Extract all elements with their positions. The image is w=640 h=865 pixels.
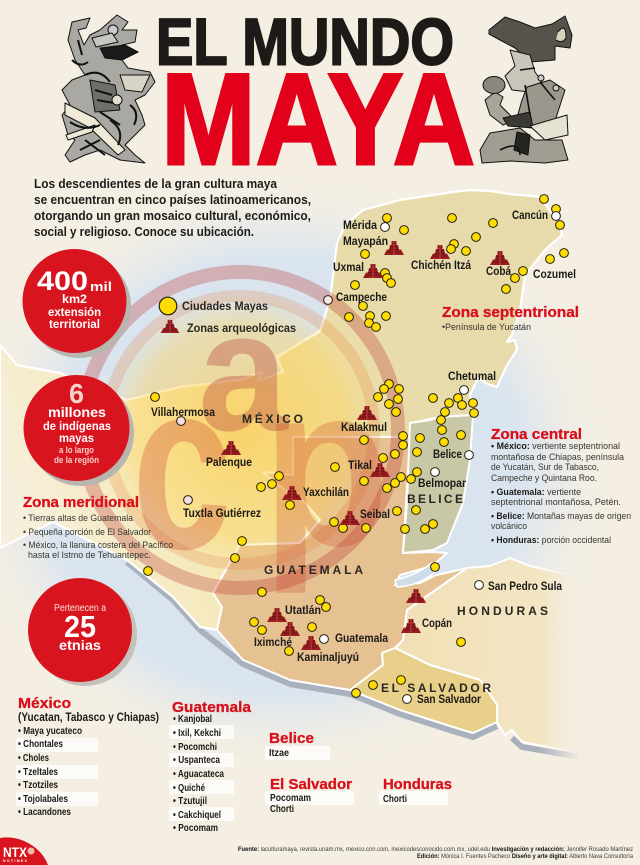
panel: ethnic groups Guatemala: [169, 699, 252, 834]
map labels: Campeche: [336, 292, 387, 304]
panel: ethnic groups Belice: [265, 730, 330, 760]
panel: ethnic groups México: • Lacandones: [18, 806, 71, 818]
watermark: c: [132, 331, 232, 599]
map labels: Belmopar: [418, 478, 466, 490]
logo: NTX Notimex: [0, 837, 48, 865]
panel: ethnic groups El Salvador: El Salvador: [270, 776, 352, 793]
panel: Zona central: septentrional montañosa, Petén.: [491, 497, 621, 508]
map labels: Guatemala: [335, 633, 389, 645]
panel: ethnic groups México: • Tojolabales: [18, 793, 68, 805]
sources and credits: Edición: Mónica I. Fuentes Pacheco Diseño y arte digital: Alberto Nava Consultoría: [417, 853, 633, 860]
stat circle: 6 millones: de indígenas: [43, 419, 111, 433]
map labels: Villahermosa: [151, 407, 216, 419]
panel: ethnic groups Guatemala: • Ixil, Kekchi: [173, 727, 221, 739]
stat circle: 25 etnias: [28, 578, 137, 686]
stat circle: 400 mil km2: 400: [37, 266, 88, 296]
map of the Maya region: [0, 190, 600, 757]
watermark: a: [198, 277, 289, 467]
sources and credits: Fuente: laculturamaya, revista.unam.mx, mexico.cnn.com, mexicodesconocido.com.mx, udel.edu Investigación y redacción: Jennifer Rosado Martínez: [238, 846, 634, 853]
panel: ethnic groups El Salvador: Chorti: [270, 803, 294, 815]
map labels: San Pedro Sula: [488, 581, 563, 593]
panel: Zona central: • México: vertiente septentrional: [491, 441, 620, 452]
panel: Zona meridional: [23, 494, 173, 561]
map labels: BELICE: [407, 492, 463, 506]
stat circle: 6 millones: 6: [69, 378, 84, 409]
stat circle: 25 etnias: etnias: [59, 637, 101, 653]
panel: ethnic groups México: (Yucatan, Tabasco y Chiapas): [18, 712, 159, 724]
stat circle: 6 millones: millones: [48, 404, 106, 420]
sources and credits: [238, 846, 634, 860]
panel: Zona septentrional: [442, 304, 579, 333]
region: Belice: [403, 415, 473, 553]
markers: archaeological zones: [221, 241, 510, 650]
stat circle: 400 mil km2: mil: [90, 279, 112, 294]
map labels: Seibal: [360, 509, 390, 521]
map labels: Mérida: [343, 220, 378, 232]
panel: Zona meridional: • México, la llanura costera del Pacífico: [23, 540, 173, 551]
panel: ethnic groups México: • Choles: [18, 752, 49, 764]
region: México and Yucatán peninsula: [0, 190, 562, 630]
map labels: Iximché: [254, 637, 292, 649]
map labels: Palenque: [206, 457, 252, 469]
stat circle: 6 millones: mayas: [59, 431, 94, 445]
stat circle: 6 millones: de la región: [54, 455, 99, 465]
panel: ethnic groups Guatemala: • Quiché: [173, 782, 205, 794]
panel: ethnic groups El Salvador: [265, 776, 354, 815]
panel: ethnic groups Guatemala: Guatemala: [172, 699, 252, 716]
intro text: social y religioso. Conoce su ubicación.: [34, 224, 254, 239]
panel: Zona central: volcánico: [491, 521, 527, 532]
panel: Zona central: [491, 426, 631, 546]
panel: ethnic groups México: • Tzotziles: [18, 779, 58, 791]
icon: Maya warrior figure: [62, 15, 155, 163]
map labels: Chetumal: [448, 371, 496, 383]
logo: NTX Notimex: NOTIMEX: [3, 859, 28, 863]
map labels: MÉXICO: [242, 411, 303, 426]
map labels: Utatlán: [285, 605, 321, 617]
map labels: Kalakmul: [341, 422, 387, 434]
panel: Zona central: • Guatemala: vertiente: [491, 487, 581, 498]
panel: Zona central: montañosa de Chiapas, península: [491, 452, 625, 463]
map labels: Yaxchilán: [303, 487, 349, 499]
logo: NTX Notimex: NTX: [3, 844, 28, 860]
panel: Zona central: de Yucatán, Sur de Tabasco,: [491, 462, 599, 473]
intro text: otorgando un gran mosaico cultural, económico,: [34, 208, 311, 223]
intro text: Los descendientes de la gran cultura maya: [34, 176, 278, 191]
panel: ethnic groups Guatemala: • Aguacateca: [173, 768, 224, 780]
region: Honduras: [395, 558, 600, 753]
map labels: Cozumel: [533, 269, 576, 281]
panel: ethnic groups Honduras: [379, 776, 452, 805]
stat circle: 400 mil km2: extensión: [48, 305, 101, 319]
region: Guatemala: [213, 437, 467, 690]
panel: ethnic groups Honduras: Honduras: [383, 776, 452, 793]
panel: ethnic groups El Salvador: Pocomam: [270, 792, 311, 804]
panel: Zona central: Zona central: [491, 426, 582, 443]
panel: ethnic groups México: • Chontales: [18, 738, 63, 750]
panel: Zona central: Campeche y Quintana Roo.: [491, 473, 597, 484]
panel: ethnic groups México: México: [18, 695, 71, 712]
watermark: [82, 272, 398, 599]
map labels: Chichén Itzá: [411, 260, 472, 272]
lake Izabal: [395, 563, 437, 587]
map labels: GUATEMALA: [264, 563, 363, 577]
intro text: se encuentran en cinco países latinoamericanos,: [34, 192, 311, 207]
panel: ethnic groups Honduras: Chorti: [383, 793, 407, 805]
map labels: Tuxtla Gutiérrez: [183, 508, 261, 520]
stat circle: 25 etnias: Pertenecen a: [54, 603, 106, 614]
stat circle: 6 millones: [24, 375, 134, 486]
markers: Maya cities: [144, 195, 568, 697]
panel: Zona central: • Honduras: porción occidental: [491, 535, 611, 546]
map labels: Mayapán: [343, 236, 388, 248]
stat circle: 400 mil km2: [22, 249, 131, 358]
title: EL MUNDO: [156, 4, 454, 78]
panel: ethnic groups México: • Tzeltales: [18, 766, 58, 778]
icon: seated Maya figure with cup: [480, 16, 572, 163]
map labels: Belice: [433, 449, 462, 461]
panel: ethnic groups Guatemala: • Tzutujil: [173, 795, 207, 807]
panel: Zona meridional: hasta el Istmo de Tehuantepec.: [28, 550, 151, 561]
stat circle: 400 mil km2: territorial: [49, 317, 100, 331]
panel: ethnic groups Guatemala: • Kanjobal: [173, 713, 212, 725]
panel: ethnic groups Guatemala: • Uspanteca: [173, 754, 220, 766]
legend: Zonas arqueológicas: [187, 321, 296, 335]
region: El Salvador: [350, 648, 497, 733]
panel: Zona meridional: • Tierras altas de Guatemala: [23, 513, 134, 524]
panel: ethnic groups Guatemala: • Pocomchi: [173, 741, 217, 753]
map labels: Copán: [422, 618, 452, 630]
watermark: p: [262, 337, 390, 594]
map labels: Cobá: [486, 266, 512, 278]
panel: Zona meridional: Zona meridional: [23, 494, 139, 511]
panel: Zona septentrional: •Península de Yucatán: [442, 322, 531, 333]
panel: ethnic groups Guatemala: • Cakchiquel: [173, 809, 221, 821]
map labels: San Salvador: [417, 694, 481, 706]
map labels: HONDURAS: [457, 604, 548, 618]
intro text: [34, 176, 311, 239]
panel: Zona meridional: • Pequeña porción de El Salvador: [23, 527, 151, 538]
panel: ethnic groups Belice: Itzae: [269, 747, 289, 759]
panel: ethnic groups México: [16, 695, 159, 818]
title: MAYA: [161, 46, 475, 192]
legend: Ciudades Mayas: [182, 299, 268, 313]
panel: ethnic groups Belice: Belice: [269, 730, 314, 747]
panel: ethnic groups México: • Maya yucateco: [18, 725, 82, 737]
stat circle: 25 etnias: 25: [64, 609, 96, 644]
map labels: EL SALVADOR: [381, 681, 491, 695]
stat circle: 6 millones: a lo largo: [59, 445, 94, 455]
title: [156, 4, 475, 192]
map labels: Tikal: [348, 460, 372, 472]
map labels: Cancún: [512, 210, 548, 222]
markers: capitals and main cities: [177, 212, 560, 703]
map labels: [151, 210, 576, 706]
panel: ethnic groups Guatemala: • Pocomam: [173, 822, 218, 834]
panel: Zona septentrional: Zona septentrional: [442, 304, 579, 321]
legend: [159, 297, 296, 335]
stat circle: 400 mil km2: km2: [62, 292, 87, 306]
map labels: Uxmal: [333, 262, 364, 274]
map labels: Kaminaljuyú: [297, 652, 359, 664]
panel: Zona central: • Belice: Montañas mayas de origen: [491, 511, 631, 522]
